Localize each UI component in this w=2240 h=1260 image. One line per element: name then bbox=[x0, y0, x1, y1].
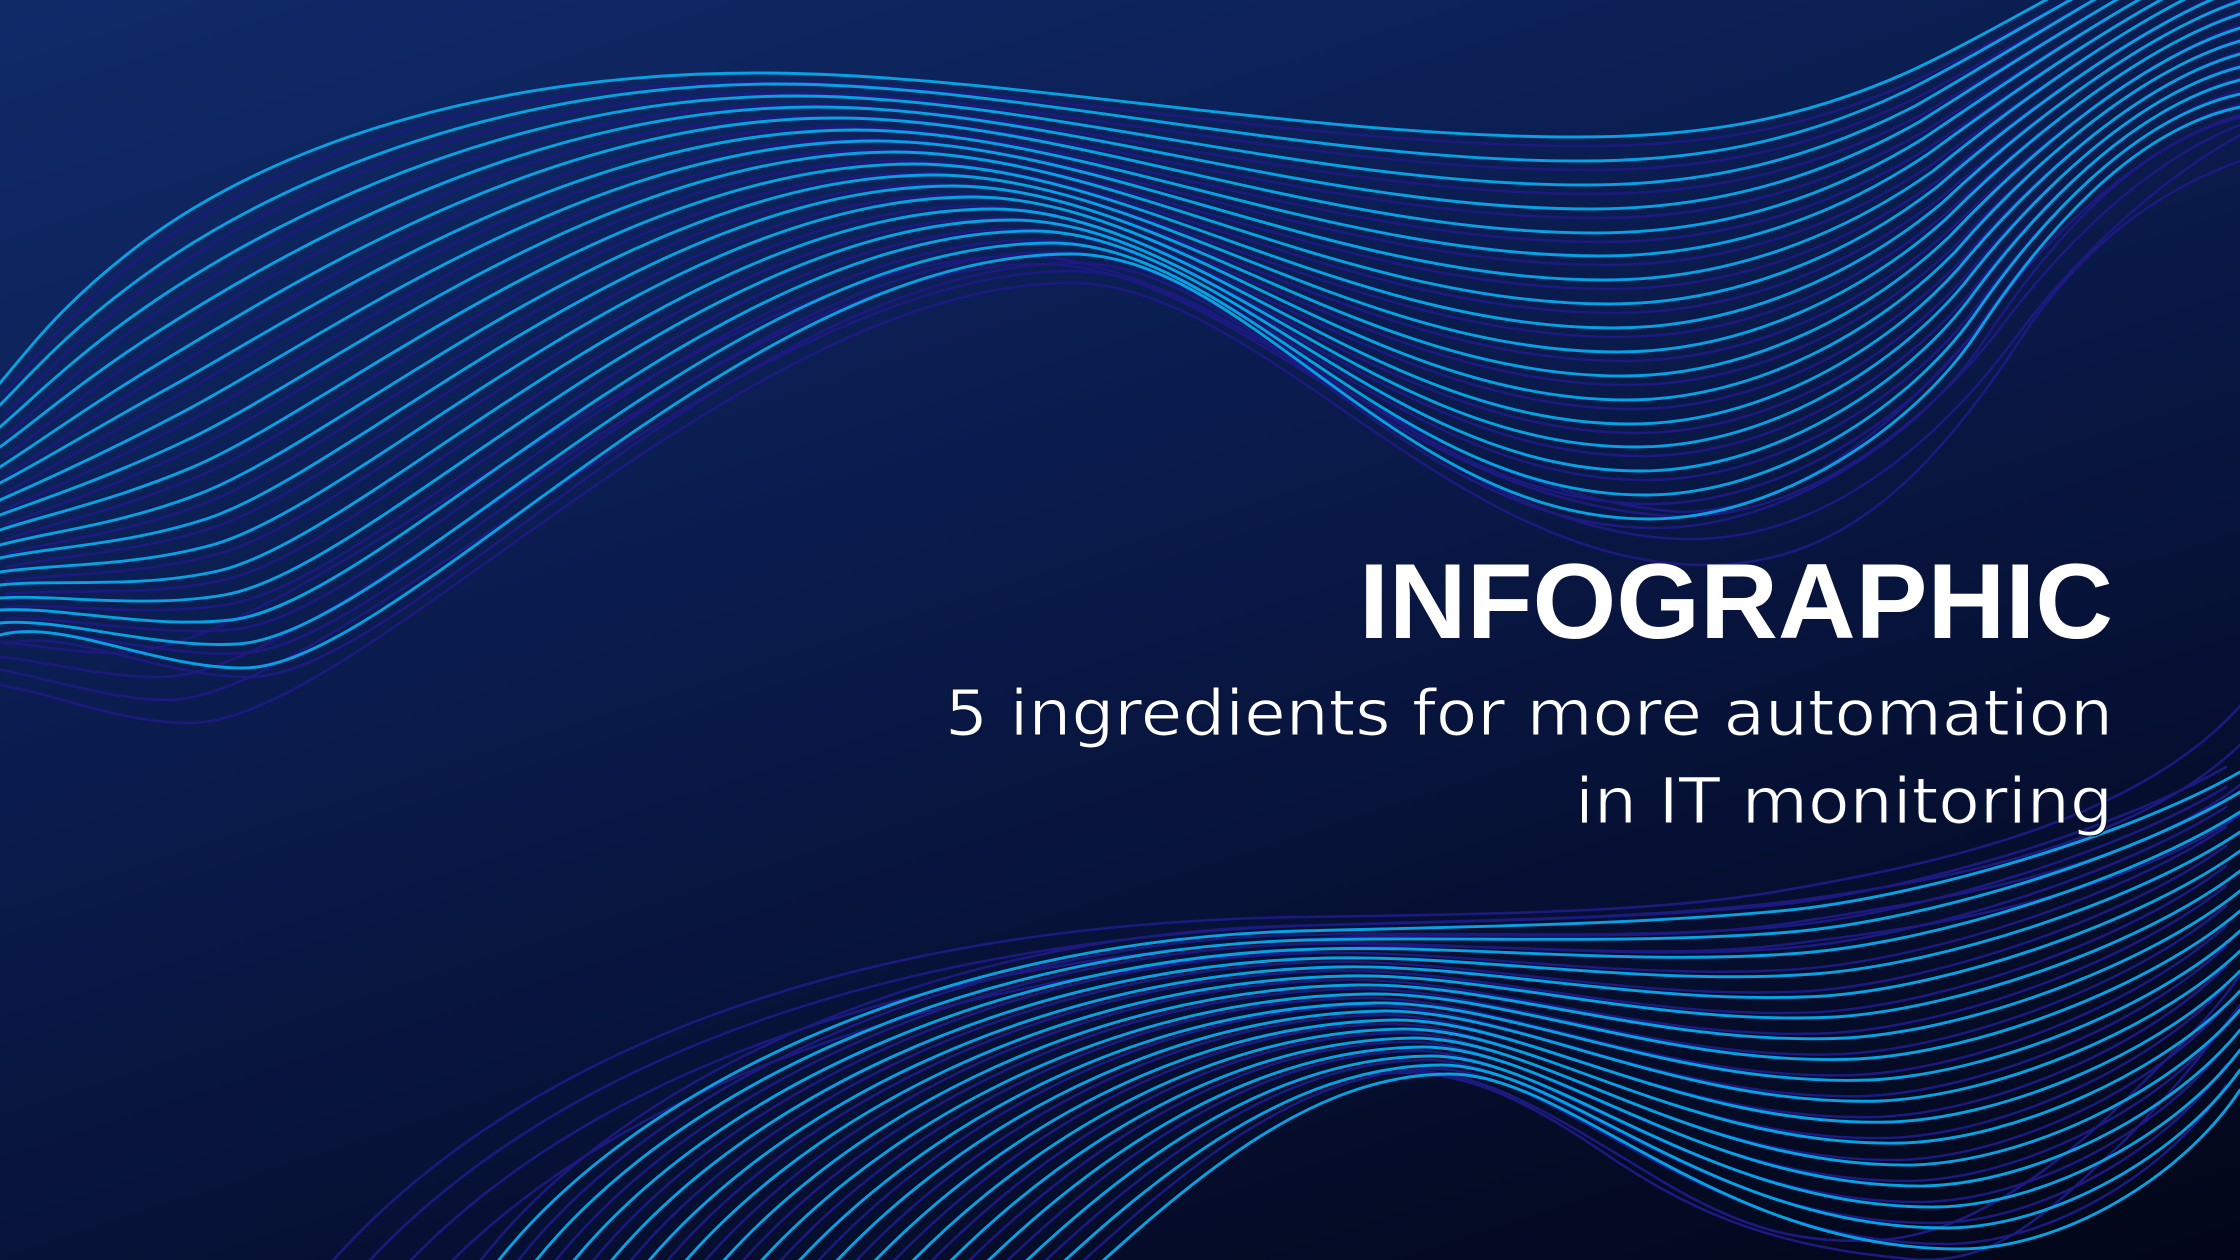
title: INFOGRAPHIC bbox=[1359, 541, 2113, 661]
subtitle line 2: in IT monitoring bbox=[1575, 765, 2113, 838]
bottom wave band bbox=[300, 706, 2240, 1260]
top wave band bbox=[0, 0, 2240, 723]
subtitle block bbox=[945, 677, 2113, 838]
bottom band: dark indigo lines bbox=[300, 706, 2240, 1260]
top band: bright blue lines bbox=[0, 0, 2240, 668]
subtitle line 1: 5 ingredients for more automation bbox=[945, 677, 2113, 750]
top band: dark indigo lines bbox=[0, 0, 2240, 723]
bottom band: bright blue lines bbox=[470, 772, 2240, 1260]
